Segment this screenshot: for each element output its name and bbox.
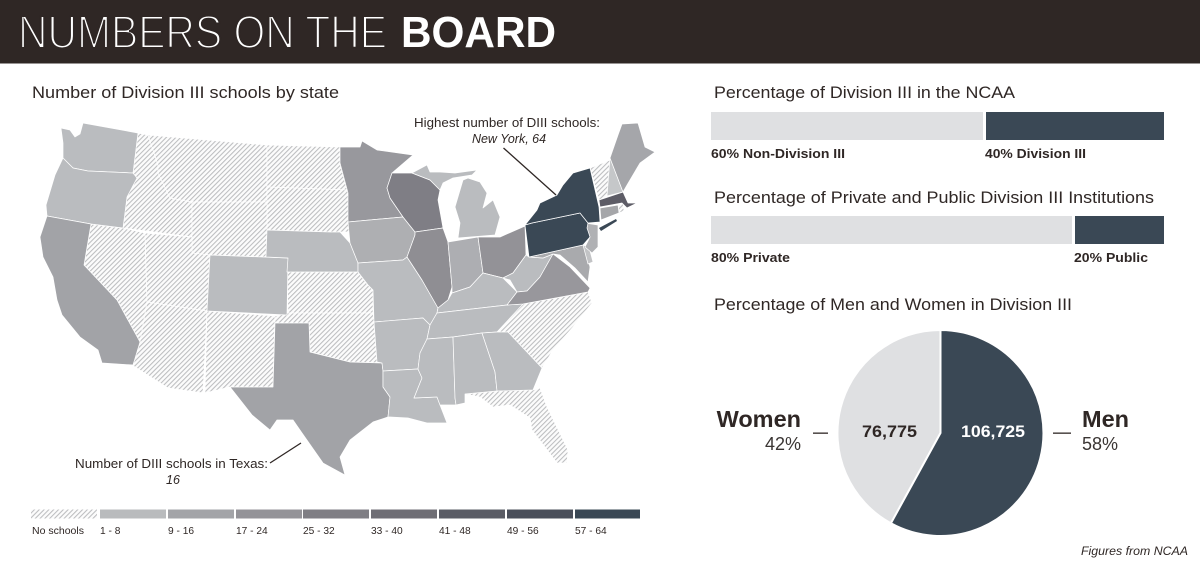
state: Michigan xyxy=(455,178,500,238)
state: Tennessee xyxy=(427,304,523,339)
legend: 9 - 16 xyxy=(168,526,194,537)
legend: 33 - 40 xyxy=(371,526,403,537)
label: men: 58% xyxy=(1082,434,1118,454)
bar chart: NCAA share: 40% Division III xyxy=(985,147,1086,161)
heading: NCAA share: Percentage of Division III in the NCAA xyxy=(714,83,1016,102)
state: Wisconsin xyxy=(387,173,443,232)
state: Delaware xyxy=(583,245,593,264)
legend: No schools xyxy=(32,526,84,537)
callout: Texas: Number of DIII schools in Texas: xyxy=(75,457,268,471)
callout: Texas xyxy=(75,443,301,487)
state: Minnesota xyxy=(340,141,413,222)
state: Indiana xyxy=(448,237,483,293)
bar chart: NCAA share xyxy=(711,112,1164,161)
state: Louisiana xyxy=(383,369,447,423)
label: women: 42% xyxy=(765,434,801,454)
heading: map: Number of Division III schools by state xyxy=(32,83,339,102)
pie chart: men and women xyxy=(837,330,1043,536)
bar chart: private and public: 80% Private xyxy=(711,251,790,265)
no-school states xyxy=(84,133,624,463)
state: Mississippi xyxy=(414,337,456,405)
state: Michigan upper xyxy=(412,165,477,190)
state: Oregon xyxy=(46,158,137,228)
state: Maine xyxy=(610,123,655,192)
legend: 1 - 8 xyxy=(100,526,121,537)
state: Maryland xyxy=(529,245,590,282)
legend: 25 - 32 xyxy=(303,526,335,537)
state: Illinois xyxy=(407,228,452,308)
map: Division III schools by state xyxy=(40,123,655,475)
pie chart: men and women: 106,725 xyxy=(961,423,1025,441)
state: Missouri xyxy=(358,257,438,325)
title: NUMBERS ON THE xyxy=(18,6,387,58)
state: Alabama xyxy=(453,333,497,405)
legend: 49 - 56 xyxy=(507,526,539,537)
label: men xyxy=(1053,406,1129,454)
pie chart: men and women: 76,775 xyxy=(862,423,917,441)
state: Colorado xyxy=(207,255,288,315)
state: Iowa xyxy=(348,217,415,263)
legend: 17 - 24 xyxy=(236,526,268,537)
state: West Virginia xyxy=(503,254,553,292)
state: Ohio xyxy=(478,226,526,278)
state: Virginia xyxy=(507,254,590,305)
state: Long Island xyxy=(599,219,617,231)
callout: New York: Highest number of DIII schools: xyxy=(414,116,600,130)
heading: men and women: Percentage of Men and Women in Division III xyxy=(714,295,1072,314)
state: Massachusetts xyxy=(599,192,637,208)
legend: 57 - 64 xyxy=(575,526,607,537)
title: bold word: BOARD xyxy=(401,8,556,57)
state: Washington xyxy=(61,123,138,173)
state: California xyxy=(40,216,140,365)
state: Kentucky xyxy=(437,273,517,313)
callout: New York: New York, 64 xyxy=(472,132,546,146)
legend: 41 - 48 xyxy=(439,526,471,537)
bar chart: private and public xyxy=(711,216,1164,265)
label: women xyxy=(717,406,828,454)
state: New Hampshire xyxy=(607,158,623,196)
state: New Jersey xyxy=(585,223,598,253)
state: New York xyxy=(525,168,600,225)
bar chart: private and public: 20% Public xyxy=(1074,251,1148,265)
title banner xyxy=(0,0,1200,64)
label: women: Women xyxy=(717,406,801,432)
bar chart: NCAA share: 60% Non-Division III xyxy=(711,147,845,161)
state: Georgia xyxy=(482,332,542,391)
legend xyxy=(31,510,640,537)
source note: Figures from NCAA xyxy=(1081,546,1188,558)
heading: private and public: Percentage of Private and Public Division III Institutions xyxy=(714,188,1154,207)
callout: Texas: 16 xyxy=(166,473,180,487)
label: men: Men xyxy=(1082,406,1129,432)
state: Nebraska xyxy=(266,230,358,272)
callout: New York xyxy=(414,116,600,195)
state: Texas xyxy=(230,323,390,475)
state: Arkansas xyxy=(374,318,430,371)
state: Pennsylvania xyxy=(525,213,590,257)
state: Connecticut xyxy=(600,205,619,220)
